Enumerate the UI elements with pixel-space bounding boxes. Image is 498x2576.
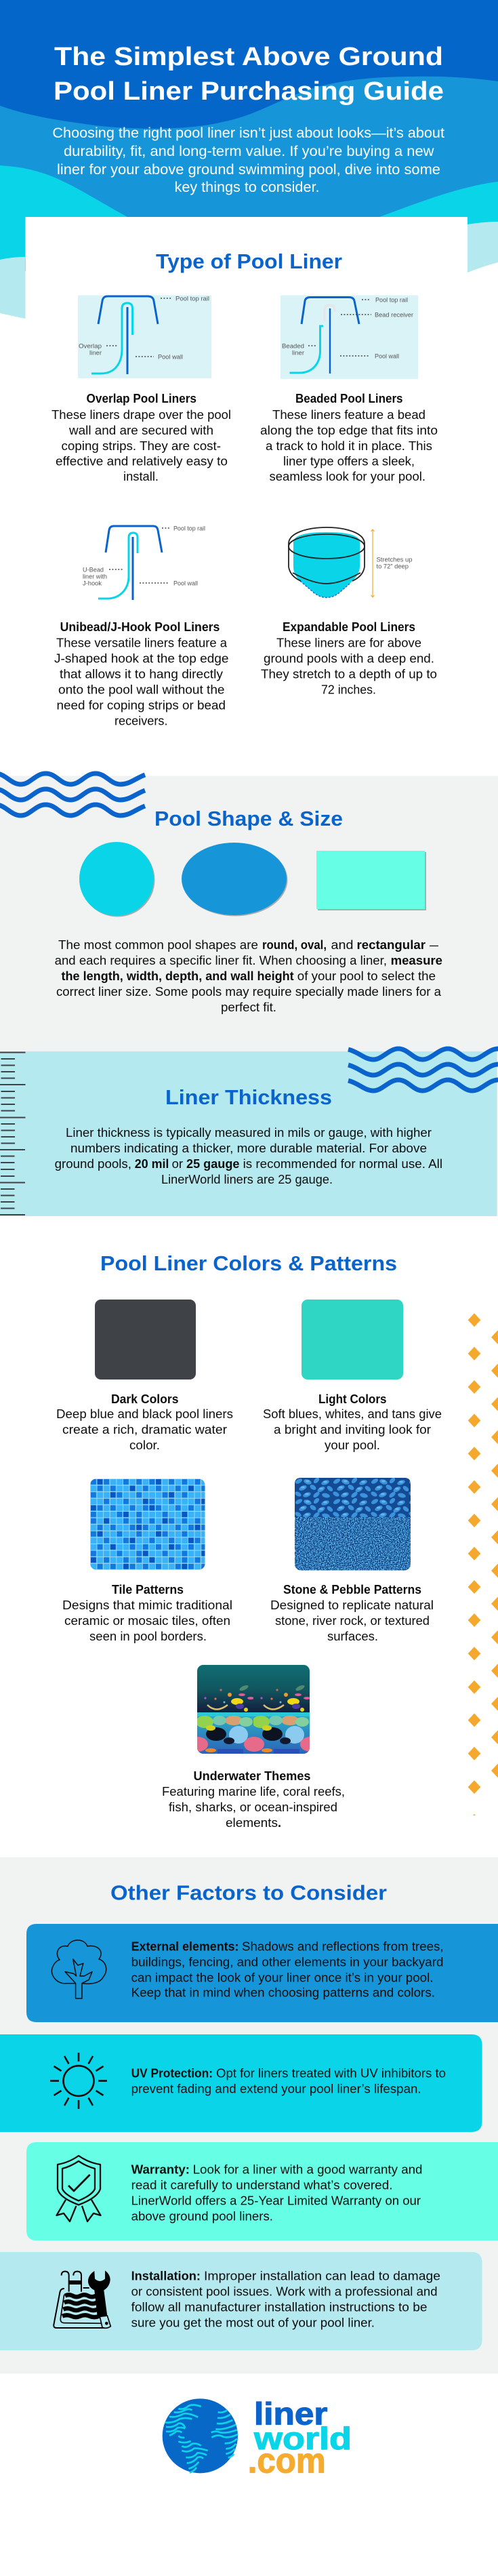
text: pool shape description: measure [391, 954, 442, 967]
heading: liner thickness: Liner Thickness [165, 1085, 332, 1109]
icon: tree [51, 1940, 106, 1998]
icon: shield with ribbon [57, 2156, 100, 2221]
text: external elements: Keep that in mind when choosing patterns and colors. [131, 1986, 435, 2000]
text: installation: or consistent pool issues. Work with a professional and [131, 2285, 438, 2298]
text: pool shape description: round, oval, [262, 938, 327, 952]
panel: pool liner colors and patterns [56, 1251, 498, 1830]
decorative diamonds column [468, 1313, 498, 1815]
text: underwater themes: elements [226, 1816, 278, 1830]
text: expandable pool liners: 72 inches. [321, 683, 376, 697]
text: liner thickness description [55, 1126, 442, 1186]
text: tile patterns: seen in pool borders. [89, 1630, 207, 1643]
text: pool shape description: correct liner size. Some pools may require specially made liners for a [56, 985, 442, 999]
swatch: light colors [302, 1300, 403, 1380]
text: overlap pool liners: These liners drape over the pool [51, 408, 231, 422]
text: light colors [263, 1392, 442, 1452]
panel: other factors to consider [0, 1857, 498, 2374]
text: overlap pool liners: install. [123, 470, 159, 483]
text: liner thickness description: is recommended for normal use. All [243, 1157, 442, 1171]
text: unibead j-hook pool liners: need for coping strips or bead [57, 699, 226, 712]
text: stone and pebble patterns: stone, river rock, or textured [275, 1614, 430, 1628]
text: beaded pool liners: seamless look for your pool. [270, 470, 426, 483]
text: stone and pebble patterns: Designed to replicate natural [270, 1598, 434, 1612]
diagram: expandable liner: to 72” deep [377, 563, 409, 571]
panel: type of pool liner [26, 217, 468, 759]
text: uv protection: prevent fading and extend your pool liner’s lifespan. [131, 2082, 421, 2096]
intro text: liner for your above ground swimming pool, dive into some [57, 162, 440, 178]
logo text: liner [254, 2396, 327, 2432]
text: liner thickness description: ground pools, [55, 1157, 131, 1171]
text: beaded pool liners: Beaded Pool Liners [295, 392, 402, 405]
intro text: durability, fit, and long-term value. If you’re buying a new [64, 144, 434, 159]
panel: liner thickness [0, 1049, 498, 1216]
diagram: unibead j-hook liner: Pool wall [173, 580, 198, 587]
text: overlap pool liners: effective and relatively easy to [56, 454, 228, 468]
intro text [52, 125, 444, 195]
text: pool shape description: — [430, 938, 438, 952]
text: overlap pool liners: wall and are secured with [68, 424, 213, 437]
text: stone and pebble patterns: Stone & Pebble Patterns [283, 1583, 421, 1596]
text: overlap pool liners: Overlap Pool Liners [87, 392, 196, 405]
card: uv protection [0, 2034, 482, 2132]
logo text: .com [248, 2442, 326, 2481]
text: pool shape description: The most common pool shapes are [58, 938, 258, 952]
heading: colors and patterns: Pool Liner Colors & Patterns [100, 1251, 397, 1275]
shape: rectangular pool [316, 851, 426, 910]
text: overlap pool liners: coping strips. They are cost- [61, 439, 221, 453]
text: light colors: a bright and inviting look for [274, 1423, 431, 1436]
diagram: beaded liner: Beaded [282, 343, 304, 350]
text: beaded pool liners: a track to hold it in place. This [266, 439, 432, 453]
text: liner thickness description: or [172, 1157, 183, 1171]
text: external elements: Shadows and reflections from trees, [242, 1940, 443, 1954]
text: light colors: Light Colors [318, 1392, 386, 1406]
logo text [248, 2396, 352, 2481]
panel: pool shape and size [0, 773, 498, 1052]
title: Pool Liner Purchasing Guide [54, 77, 444, 106]
text: installation: sure you get the most out of your pool liner. [131, 2316, 375, 2329]
text: warranty: above ground pool liners. [131, 2210, 273, 2223]
heading: other factors: Other Factors to Consider [110, 1880, 387, 1905]
text: dark colors [56, 1392, 233, 1452]
diagram: beaded liner: liner [292, 350, 304, 357]
text: tile patterns: Designs that mimic traditional [62, 1598, 232, 1612]
text: dark colors: create a rich, dramatic water [62, 1423, 227, 1436]
intro text: Choosing the right pool liner isn’t just about looks—it’s about [52, 125, 444, 141]
text: tile patterns: ceramic or mosaic tiles, often [64, 1614, 230, 1628]
text: liner thickness description: 25 gauge [186, 1157, 240, 1171]
diagram: overlap liner: Overlap [79, 343, 102, 350]
text: liner thickness description: LinerWorld liners are 25 gauge. [161, 1173, 333, 1186]
text: pool shape description [55, 938, 442, 1014]
text: dark colors: Dark Colors [111, 1392, 179, 1406]
text: beaded pool liners: These liners feature a bead [272, 408, 426, 422]
swatch: stone and pebble pattern [295, 1478, 411, 1570]
title [54, 43, 444, 106]
diagram: overlap liner: liner [89, 350, 102, 357]
text: installation [131, 2270, 440, 2329]
text: warranty: LinerWorld offers a 25-Year Limited Warranty on our [131, 2194, 421, 2207]
text: unibead j-hook pool liners: receivers. [115, 715, 168, 728]
shape: oval pool [182, 843, 287, 917]
text: beaded pool liners: liner type offers a sleek, [283, 454, 415, 468]
text: tile patterns: Tile Patterns [112, 1583, 184, 1596]
text: unibead j-hook pool liners: These versatile liners feature a [56, 637, 228, 650]
text: stone and pebble patterns: surfaces. [327, 1630, 378, 1643]
swatch: dark colors [95, 1300, 196, 1380]
text: pool shape description: rectangular [356, 938, 426, 952]
text: underwater themes: fish, sharks, or ocean-inspired [169, 1800, 337, 1814]
text: expandable pool liners [261, 620, 437, 697]
text: unibead j-hook pool liners: Unibead/J-Hook Pool Liners [60, 620, 220, 634]
text: stone and pebble patterns [270, 1583, 434, 1643]
text: external elements: buildings, fencing, and other elements in your backyard [131, 1955, 443, 1969]
diagram: unibead j-hook liner: J-hook [83, 580, 102, 587]
diagram: expandable liner [289, 527, 412, 598]
text: expandable pool liners: These liners are for above [276, 637, 421, 650]
text: light colors: Soft blues, whites, and tans give [263, 1407, 442, 1421]
text: tile patterns [62, 1583, 232, 1643]
text: dark colors: color. [129, 1438, 160, 1452]
text: warranty: read it carefully to understand what’s covered. [131, 2179, 393, 2192]
text: expandable pool liners: ground pools with a deep end. [264, 652, 434, 666]
text: warranty: Warranty: [131, 2162, 190, 2176]
text: uv protection [131, 2066, 446, 2096]
text: liner thickness description: Liner thickness is typically measured in mils or gauge, with higher [66, 1126, 432, 1140]
card: installation [0, 2252, 482, 2350]
text: unibead j-hook pool liners: that allows it to hang directly [60, 668, 223, 681]
text: unibead j-hook pool liners [54, 620, 229, 728]
diagram: unibead j-hook liner [83, 525, 205, 600]
text: expandable pool liners: They stretch to a depth of up to [261, 668, 437, 681]
text: dark colors: Deep blue and black pool liners [56, 1407, 233, 1421]
intro text: key things to consider. [175, 180, 320, 195]
icon: globe [163, 2398, 238, 2473]
diagram: beaded liner: Pool wall [375, 353, 399, 361]
heading: type of pool liner: Type of Pool Liner [156, 249, 342, 273]
ruler [0, 1052, 26, 1215]
text: unibead j-hook pool liners: onto the pool wall without the [58, 683, 225, 697]
swatch: underwater theme [197, 1665, 310, 1754]
text: pool shape description: the length, width, depth, and wall height [61, 969, 294, 983]
diagram: unibead j-hook liner: U-Bead [83, 567, 104, 573]
swatch: tile pattern [90, 1479, 205, 1570]
text: uv protection: Opt for liners treated with UV inhibitors to [216, 2066, 446, 2080]
text: external elements: External elements: [131, 1940, 238, 1954]
text: pool shape description: of your pool to select the [297, 969, 436, 983]
text: pool shape description: and [331, 938, 354, 952]
text: underwater themes: Underwater Themes [194, 1769, 310, 1783]
text: installation: Installation: [131, 2270, 201, 2283]
text: pool shape description: and each requires a specific liner fit. When choosing a liner, [55, 954, 387, 967]
waves: top left [0, 773, 145, 816]
diagram: overlap liner: Pool wall [158, 354, 183, 361]
text: unibead j-hook pool liners: J-shaped hook at the top edge [54, 652, 229, 666]
text: beaded pool liners: along the top edge that fits into [260, 424, 438, 437]
text: underwater themes: Featuring marine life, coral reefs, [162, 1785, 345, 1798]
text: external elements [131, 1940, 443, 2000]
diagram: unibead j-hook liner: Pool top rail [173, 525, 205, 533]
diagram: unibead j-hook liner: liner with [83, 573, 107, 580]
text: overlap pool liners [51, 392, 231, 483]
diagram: overlap liner: Pool top rail [175, 296, 209, 302]
text: underwater themes: . [278, 1816, 281, 1830]
text: beaded pool liners [260, 392, 438, 483]
logo text: world [253, 2421, 352, 2456]
text: warranty: Look for a liner with a good warranty and [193, 2162, 423, 2176]
shape: round pool [79, 842, 154, 917]
diagram: beaded liner [281, 296, 418, 379]
logo: liner world [163, 2396, 352, 2481]
text: installation: Improper installation can lead to damage [204, 2270, 440, 2283]
background: layered water waves [0, 0, 498, 319]
heading: pool shape and size: Pool Shape & Size [154, 807, 343, 830]
text: warranty [131, 2162, 423, 2223]
diagram: beaded liner: Bead receiver [375, 312, 413, 319]
title: The Simplest Above Ground [54, 43, 443, 71]
text: external elements: can impact the look of your liner once it’s in your pool. [131, 1971, 434, 1985]
waves: top right [348, 1049, 498, 1091]
icon: pool and wrench [54, 2270, 110, 2328]
text: expandable pool liners: Expandable Pool Liners [283, 620, 415, 634]
diagram: overlap liner [78, 296, 211, 378]
diagram: expandable liner: Stretches up [377, 556, 412, 564]
text: liner thickness description: numbers indicating a thicker, more durable material. For above [70, 1142, 427, 1155]
text: installation: follow all manufacturer installation instructions to be [131, 2301, 427, 2314]
diagram: beaded liner: Pool top rail [375, 297, 408, 304]
text: uv protection: UV Protection: [131, 2066, 213, 2080]
text: liner thickness description: 20 mil [135, 1157, 169, 1171]
card: warranty [26, 2142, 498, 2240]
text: light colors: your pool. [325, 1438, 380, 1452]
card: external elements [26, 1924, 498, 2022]
icon: sun [50, 2053, 107, 2109]
text: underwater themes [162, 1769, 345, 1830]
text: pool shape description: perfect fit. [221, 1001, 276, 1014]
